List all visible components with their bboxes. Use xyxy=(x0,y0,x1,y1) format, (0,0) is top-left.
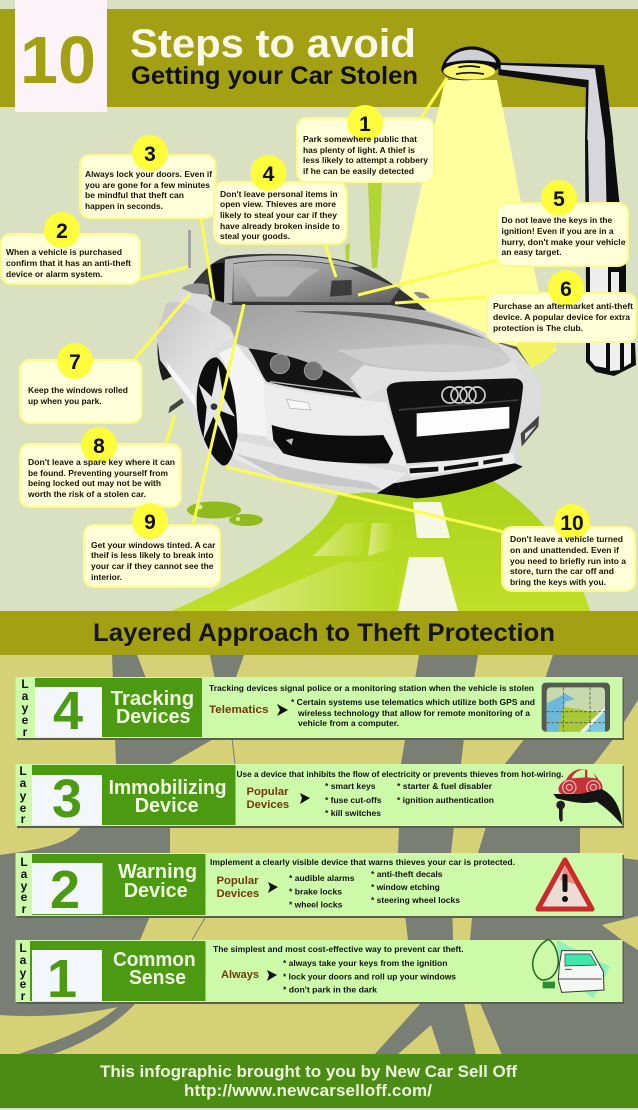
panel: layer 2: Popular xyxy=(216,875,259,887)
panel: layer 4: Tracking devices signal police or a monitoring station when the vehicle is stolen xyxy=(209,683,534,693)
lower lip xyxy=(407,453,515,477)
light cone xyxy=(400,80,556,376)
panel: layer 4: L xyxy=(21,677,29,691)
callout 10: Don't leave a vehicle turned xyxy=(510,535,623,544)
callout 2: confirm that it has an anti-theft xyxy=(6,259,131,268)
arrow xyxy=(277,704,288,716)
big number 10: 10 xyxy=(20,23,96,98)
callout 1: Park somewhere public that xyxy=(303,135,417,144)
callout 3 xyxy=(80,135,216,218)
callout 7: 7 xyxy=(69,351,81,374)
callout 4: steal your goods. xyxy=(220,232,290,241)
arrow xyxy=(267,970,277,981)
callout 8: worth the risk of a stolen car. xyxy=(27,490,146,499)
footer band: This infographic brought to you by New Car Sell Off xyxy=(100,1062,517,1081)
panel: layer 3: e xyxy=(20,801,27,815)
callout 2 xyxy=(1,212,140,284)
callout 5: an easy target. xyxy=(502,248,562,257)
callout 6: protection is The club. xyxy=(493,324,583,333)
panel: layer 3: * kill switches xyxy=(325,808,381,818)
panel: layer 1: e xyxy=(20,977,27,991)
license plate xyxy=(417,407,509,437)
panel: layer 4: Tracking xyxy=(111,688,194,710)
callout 8: 8 xyxy=(93,435,105,458)
panel: layer 4: wireless technology that allow for remote monitoring of a xyxy=(297,708,530,718)
audi rings xyxy=(442,387,485,403)
panel: layer 2: * steering wheel locks xyxy=(371,895,460,905)
panel: layer 1: 1 xyxy=(47,949,77,1009)
callout 9: Get your windows tinted. A car xyxy=(91,541,216,550)
panel: layer 1: L xyxy=(19,941,27,955)
title: steps to avoid: Steps to avoid xyxy=(130,22,416,66)
panel: layer 1: Always xyxy=(221,969,259,981)
panel: layer 4: 4 xyxy=(53,681,83,741)
panel: layer 1: * always take your keys from the ignition xyxy=(283,958,447,968)
callout 3: Always lock your doors. Even if xyxy=(85,170,212,179)
panel: layer 2: * window etching xyxy=(371,882,440,892)
panel: layer 1: Common xyxy=(113,949,196,971)
side skirt xyxy=(167,362,197,408)
callout 5: Do not leave the keys in the xyxy=(502,216,613,225)
callout 9: theif is less likely to break into xyxy=(91,551,214,560)
callout 1: 1 xyxy=(359,113,371,136)
panel: layer 2: a xyxy=(21,867,28,881)
panel: layer 2: L xyxy=(20,855,28,869)
arrow xyxy=(300,793,310,804)
panel: layer 2: * anti-theft decals xyxy=(371,869,443,879)
panel: layer 1: a xyxy=(20,953,27,967)
panel: layer 4: * Certain systems use telematics which utilize both GPS and xyxy=(291,697,535,707)
callout 9: interior. xyxy=(91,573,122,582)
callout 1 xyxy=(297,105,434,182)
callout 3: happen in seconds. xyxy=(85,202,163,211)
far wheel xyxy=(158,318,172,381)
callout 4: likely to steal your car if they xyxy=(220,211,338,220)
panel: layer 3: * starter & fuel disabler xyxy=(397,781,493,791)
panel: layer 2: 2 xyxy=(50,860,80,920)
car body xyxy=(157,253,542,498)
leader lines xyxy=(134,78,504,532)
panel: layer 3: * ignition authentication xyxy=(397,795,494,805)
panel: layer 3: * smart keys xyxy=(325,781,376,791)
panel: layer 2: e xyxy=(21,890,28,904)
icon: car door and leaf xyxy=(533,939,610,998)
arrow xyxy=(268,882,278,893)
header band xyxy=(0,0,638,112)
callout 10: you need to briefly run into a xyxy=(510,557,627,566)
panel: layer 1 xyxy=(16,939,624,1009)
lower background with roads xyxy=(0,655,638,1055)
callout 9 xyxy=(84,503,220,587)
panel: layer 3: Devices xyxy=(246,799,289,811)
panel: layer 2: * wheel locks xyxy=(289,900,343,910)
callout 2: 2 xyxy=(56,220,68,243)
hood xyxy=(210,300,523,400)
fog intake xyxy=(272,425,393,463)
callout 10: on and unattended. Even if xyxy=(510,546,619,555)
panel: layer 1: Sense xyxy=(129,967,186,989)
callout 6: device. A popular device for extra xyxy=(493,313,631,322)
panel: layer 3: Immobilizing xyxy=(109,777,227,799)
headlight xyxy=(248,348,362,398)
callout 8: Don't leave a spare key where it can xyxy=(28,458,175,467)
panel: layer 1: y xyxy=(20,966,27,980)
panel: layer 2: Device xyxy=(124,880,188,902)
panel: layer 2: r xyxy=(22,902,27,916)
callout 9: 9 xyxy=(144,511,156,534)
panel: layer 3: 3 xyxy=(52,769,82,829)
panel: layer 1: * lock your doors and roll up your windows xyxy=(283,972,456,982)
panel: layer 3 xyxy=(16,764,624,829)
callout 1: less likely to attempt a robbery xyxy=(303,156,429,165)
callout 1: if he can be easily detected xyxy=(303,167,414,176)
grille xyxy=(387,378,523,463)
icon: map xyxy=(542,683,610,732)
footer band: http://www.newcarselloff.com/ xyxy=(184,1081,432,1100)
callout 5: 5 xyxy=(553,188,565,211)
panel: layer 4: Telematics xyxy=(209,704,268,716)
panel: layer 2 xyxy=(16,853,624,920)
panel: layer 4: Devices xyxy=(116,706,190,728)
panel: layer 4: a xyxy=(22,689,29,703)
callout 9: your car if they cannot see the xyxy=(91,562,214,571)
green tree stem and antenna xyxy=(188,183,382,268)
callout 3: be mindful that theft can xyxy=(85,191,184,200)
callout 10: store, turn the car off and xyxy=(510,567,614,576)
callout 4: have already broken inside to xyxy=(220,222,340,231)
callout 2: When a vehicle is purchased xyxy=(6,248,122,257)
fender and bumper xyxy=(218,345,268,437)
car xyxy=(157,253,542,498)
panel: layer 1: The simplest and most cost-effective way to prevent car theft. xyxy=(213,944,464,954)
callout 8: be found. Preventing yourself from xyxy=(28,469,168,478)
section band: layered approach: Layered Approach to Theft Protection xyxy=(93,619,555,647)
section band: layered approach xyxy=(0,611,638,655)
panel: layer 4 xyxy=(16,677,624,741)
panel: layer 2: Implement a clearly visible device that warns thieves your car is protected. xyxy=(210,857,515,867)
panel: layer 3: y xyxy=(20,789,27,803)
near wheel xyxy=(197,357,237,466)
callout 4: Don't leave personal items in xyxy=(220,190,338,199)
panel: layer 3: * fuse cut-offs xyxy=(325,795,382,805)
panel: layer 3: a xyxy=(20,776,27,790)
callout 4: open view. Thieves are more xyxy=(220,200,337,209)
panel: layer 2: * brake locks xyxy=(289,886,342,896)
panel: layer 2: * audible alarms xyxy=(289,873,355,883)
footer band xyxy=(0,1054,638,1108)
panel: layer 3: Popular xyxy=(246,786,289,798)
callout 8: being locked out may not be with xyxy=(28,479,161,488)
panel: layer 1: * don't park in the dark xyxy=(283,984,377,994)
callout 10 xyxy=(502,504,635,591)
callout 4 xyxy=(214,155,346,244)
callout 1: has plenty of light. A thief is xyxy=(303,146,416,155)
roof and windshield xyxy=(193,254,427,311)
callout 3: 3 xyxy=(144,143,156,166)
callout 2: device or alarm system. xyxy=(6,270,102,279)
callout 8 xyxy=(20,427,181,507)
panel: layer 2: y xyxy=(21,879,28,893)
panel: layer 4: e xyxy=(22,713,29,727)
icon: red car and key in hand xyxy=(553,769,622,825)
callout 6 xyxy=(487,270,636,342)
callout 10: bring the keys with you. xyxy=(510,578,606,587)
callout 4: 4 xyxy=(263,163,275,186)
spare key xyxy=(168,398,184,413)
callout 5 xyxy=(497,180,628,266)
callout 7: up when you park. xyxy=(28,397,102,406)
subtitle: Getting your Car Stolen xyxy=(131,62,418,90)
callout 7 xyxy=(20,343,142,423)
mirrors xyxy=(182,283,209,295)
panel: layer 3: r xyxy=(21,812,26,826)
street lamp xyxy=(441,46,636,376)
icon: warning triangle xyxy=(538,860,592,909)
panel: layer 2: Warning xyxy=(118,861,197,883)
callout 10: 10 xyxy=(560,512,584,535)
panel: layer 4: r xyxy=(23,725,28,739)
panel: layer 4: y xyxy=(22,701,29,715)
callout 7: Keep the windows rolled xyxy=(28,386,128,395)
panel: layer 4: vehicle from a computer. xyxy=(298,718,399,728)
callout 6: Purchase an aftermarket anti-theft xyxy=(493,302,633,311)
panel: layer 2: Devices xyxy=(216,888,259,900)
callout 6: 6 xyxy=(560,278,572,301)
callout 3: you are gone for a few minutes xyxy=(85,181,211,190)
panel: layer 3: Device xyxy=(135,795,199,817)
callout 5: ignition! Even if you are in a xyxy=(502,227,614,236)
side panel xyxy=(157,302,233,400)
callout 5: hurry, don't make your vehicle xyxy=(502,238,626,247)
road xyxy=(172,480,590,611)
panel: layer 1: r xyxy=(21,989,26,1003)
panel: layer 3: Use a device that inhibits the flow of electricity or prevents thieves from hot-wiring. xyxy=(236,769,564,779)
panel: layer 3: L xyxy=(19,764,27,778)
